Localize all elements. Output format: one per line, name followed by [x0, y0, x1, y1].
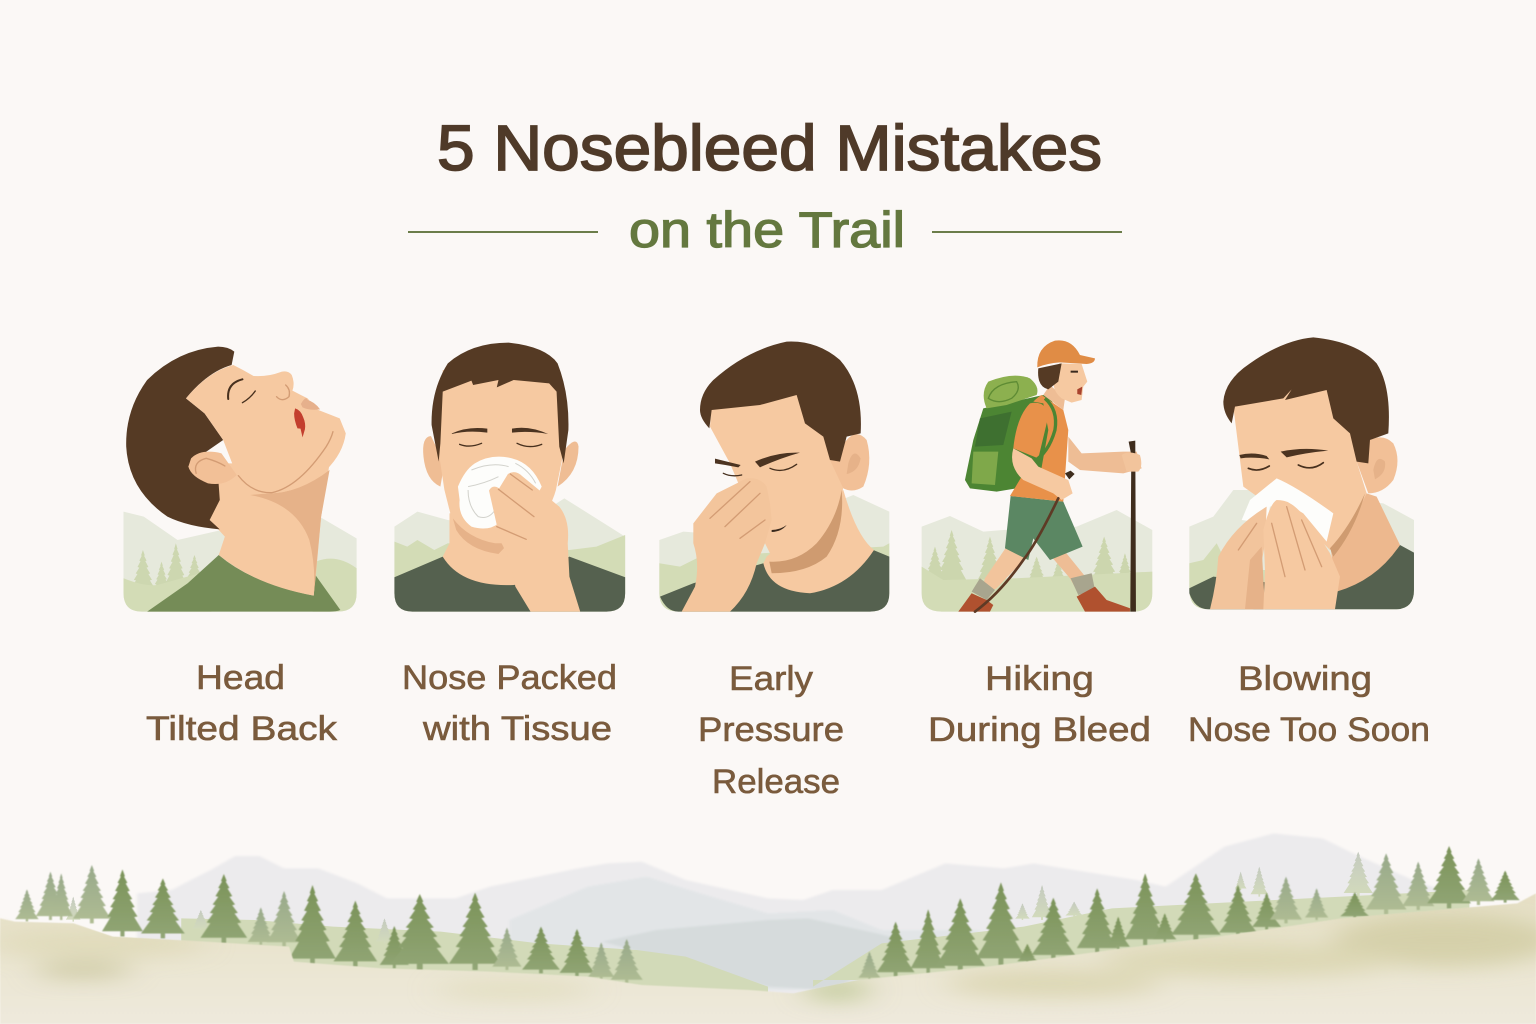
labels	[146, 659, 1430, 801]
tree line	[15, 846, 1520, 983]
head	[1053, 363, 1087, 403]
footer landscape	[0, 833, 1536, 1024]
label: early pressure release	[698, 660, 844, 801]
label: hiking during bleed: During Bleed	[928, 711, 1151, 749]
near arm	[1012, 448, 1073, 500]
label: hiking during bleed: Hiking	[985, 660, 1094, 698]
ground	[0, 893, 1536, 1024]
ears	[423, 436, 444, 487]
label: blowing nose too soon: Nose Too Soon	[1188, 711, 1430, 749]
label: blowing nose too soon: Blowing	[1238, 660, 1372, 698]
far pole	[1129, 441, 1136, 612]
hand	[489, 472, 580, 612]
panel: blowing nose too soon	[1189, 337, 1414, 609]
neck	[189, 463, 330, 596]
hands	[1210, 500, 1340, 609]
ear	[830, 434, 869, 490]
far arm	[1068, 437, 1142, 473]
face	[1233, 373, 1367, 550]
hair	[126, 347, 234, 529]
hair	[700, 342, 861, 462]
ear	[1357, 437, 1397, 493]
neck	[1043, 385, 1065, 410]
far pale trees	[66, 852, 1373, 943]
label: head tilted back	[146, 659, 338, 748]
label: nose packed with tissue: with Tissue	[422, 710, 612, 748]
ear	[188, 452, 237, 484]
neck	[443, 497, 549, 585]
label: early pressure release: Release	[712, 763, 840, 801]
hair	[432, 343, 568, 463]
green middle hills	[181, 918, 768, 997]
label: early pressure release: Pressure	[698, 711, 844, 749]
label: head tilted back: Head	[196, 659, 285, 697]
face	[710, 380, 843, 561]
shirt	[660, 550, 889, 612]
neck	[1330, 493, 1400, 592]
panel: nose packed with tissue	[394, 343, 625, 612]
socks	[972, 578, 995, 600]
subtitle: on the Trail	[629, 202, 905, 258]
shirt	[1189, 545, 1414, 609]
label: nose packed with tissue: Nose Packed	[402, 659, 617, 697]
shirt	[147, 555, 340, 612]
label: head tilted back: Tilted Back	[146, 710, 338, 748]
hand	[682, 478, 772, 612]
face	[186, 365, 346, 493]
blood	[294, 408, 305, 437]
backpack	[965, 376, 1057, 492]
shirt	[1010, 395, 1068, 502]
boots	[958, 593, 993, 612]
far mountains	[137, 833, 1469, 997]
panel: head tilted back	[124, 347, 357, 612]
near pole	[975, 498, 1058, 612]
neck	[763, 490, 874, 593]
tissue	[458, 457, 542, 529]
label: early pressure release: Early	[729, 660, 813, 698]
back leg	[1040, 543, 1095, 593]
shorts	[1005, 496, 1083, 560]
label: blowing nose too soon	[1188, 660, 1430, 749]
ground texture	[0, 913, 1536, 1000]
face	[439, 370, 563, 543]
tissue	[1242, 478, 1333, 542]
hair	[1223, 337, 1389, 463]
cap	[1037, 340, 1095, 367]
label: hiking during bleed	[928, 660, 1151, 749]
title: 5 Nosebleed Mistakes	[437, 112, 1102, 184]
label: nose packed with tissue	[402, 659, 617, 748]
panel: hiking during bleed	[922, 340, 1152, 612]
panel: early pressure release	[659, 342, 889, 612]
shirt	[394, 557, 625, 612]
